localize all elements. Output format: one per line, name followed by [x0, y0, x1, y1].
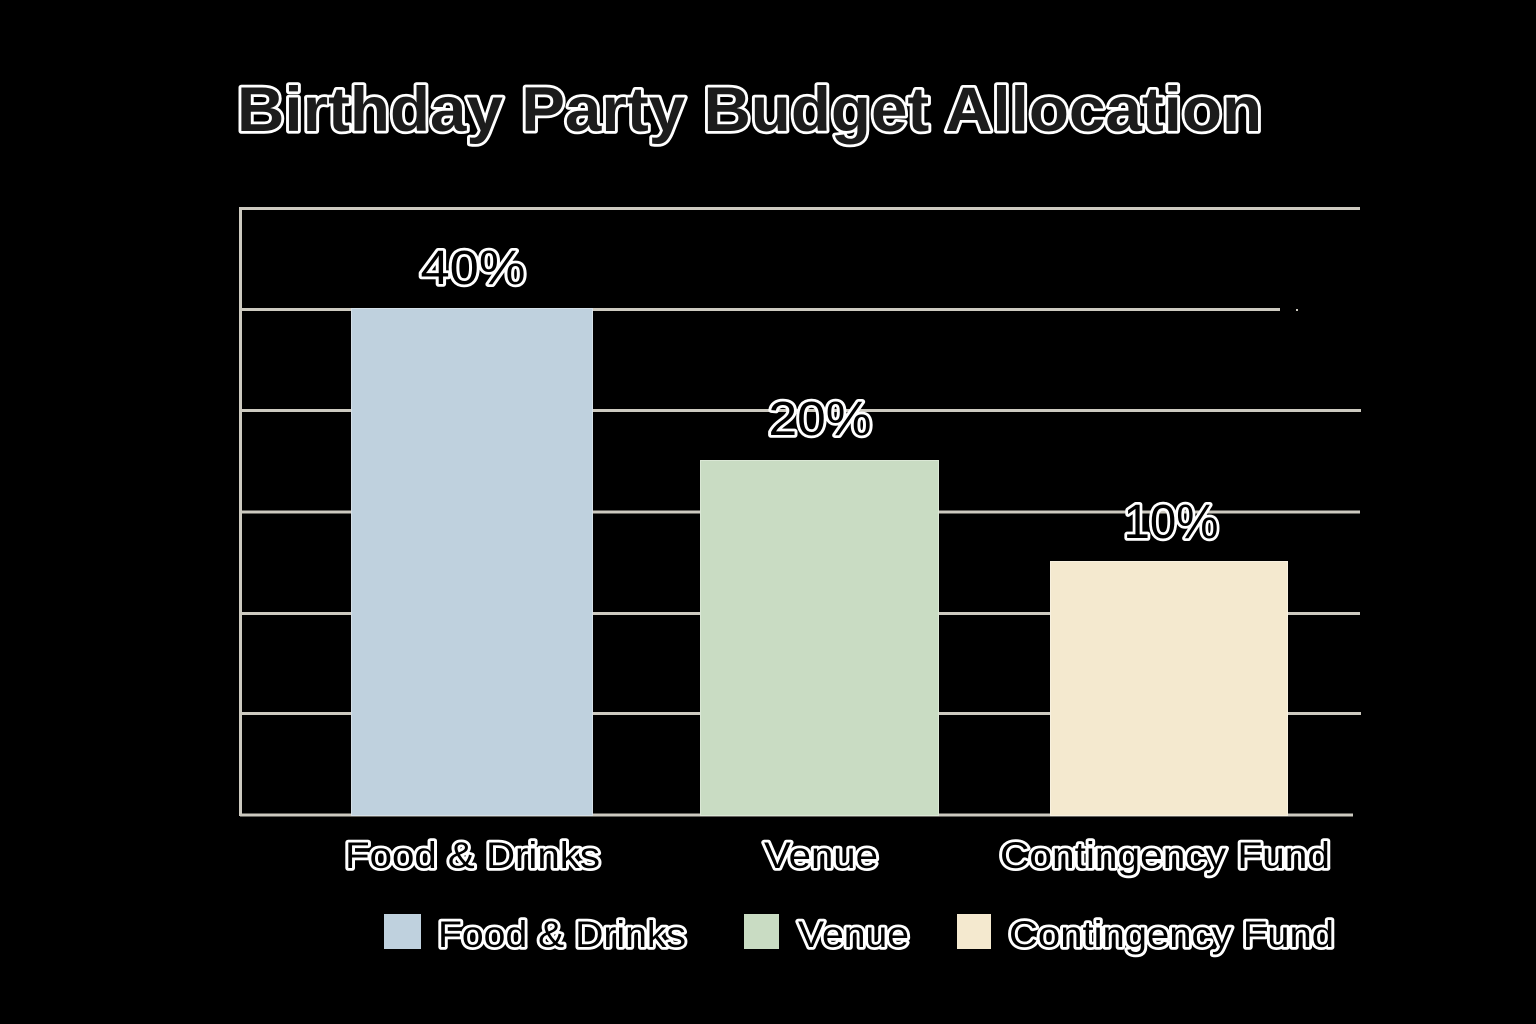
bar: Contingency Fund [1050, 562, 1288, 816]
bar: Food & Drinks [352, 308, 592, 816]
value: 20%: 20% [768, 393, 872, 446]
bar: Venue [700, 460, 938, 816]
axis label: Contingency Fund: Contingency Fund [1000, 834, 1330, 876]
title: Birthday Party Budget Allocation [237, 75, 1262, 145]
bar chart [240, 207, 1361, 876]
legend label: Venue: Venue [798, 913, 909, 955]
axis label: Food & Drinks: Food & Drinks [345, 834, 600, 876]
axis label: Venue: Venue [764, 834, 878, 876]
legend [384, 913, 1334, 955]
legend swatch: Venue [744, 914, 779, 949]
legend swatch: Food & Drinks [384, 914, 421, 949]
value: 10%: 10% [1124, 496, 1218, 549]
value: 40%: 40% [420, 242, 526, 295]
legend label: Contingency Fund: Contingency Fund [1009, 913, 1334, 955]
legend swatch: Contingency Fund [957, 914, 991, 949]
legend label: Food & Drinks: Food & Drinks [438, 913, 686, 955]
